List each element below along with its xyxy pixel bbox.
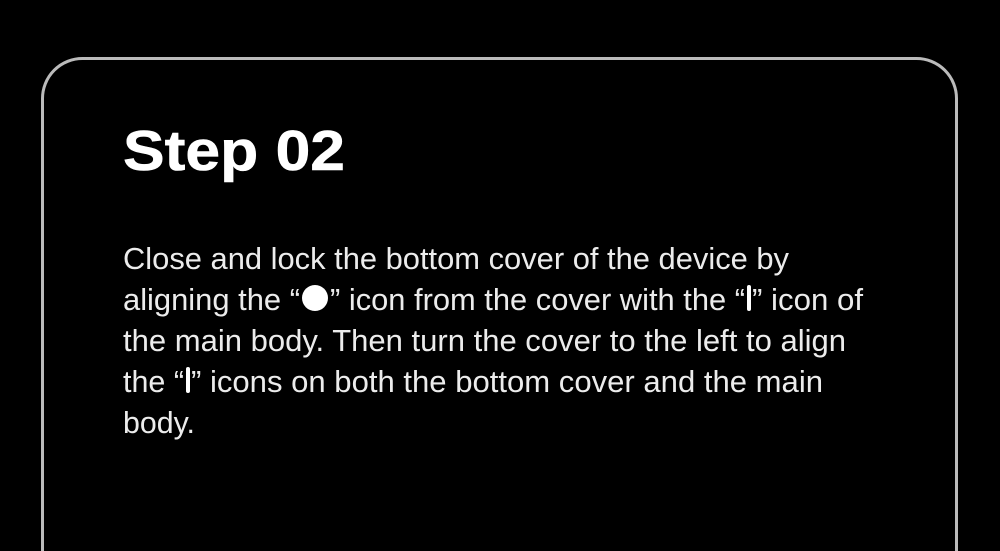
text line 2 with icons: ” icon of — [752, 282, 863, 317]
icon: vertical bar — [747, 285, 751, 311]
text line 3: the main body. Then turn the cover to the left to align — [123, 323, 846, 358]
text line 5: body. — [123, 405, 195, 440]
text line 4 with icon: ” icons on both the bottom cover and the main — [191, 364, 823, 399]
heading: Step 02: Step 02 — [123, 119, 345, 183]
icon: vertical bar — [186, 367, 190, 393]
icon: filled circle — [302, 285, 328, 311]
text line 4 with icon: the “ — [123, 364, 184, 399]
instruction text block — [123, 241, 863, 440]
text line 2 with icons: aligning the “ — [123, 282, 300, 317]
text line 1: Close and lock the bottom cover of the device by — [123, 241, 789, 276]
text line 2 with icons — [123, 282, 863, 317]
text line 2 with icons: ” icon from the cover with the “ — [330, 282, 745, 317]
